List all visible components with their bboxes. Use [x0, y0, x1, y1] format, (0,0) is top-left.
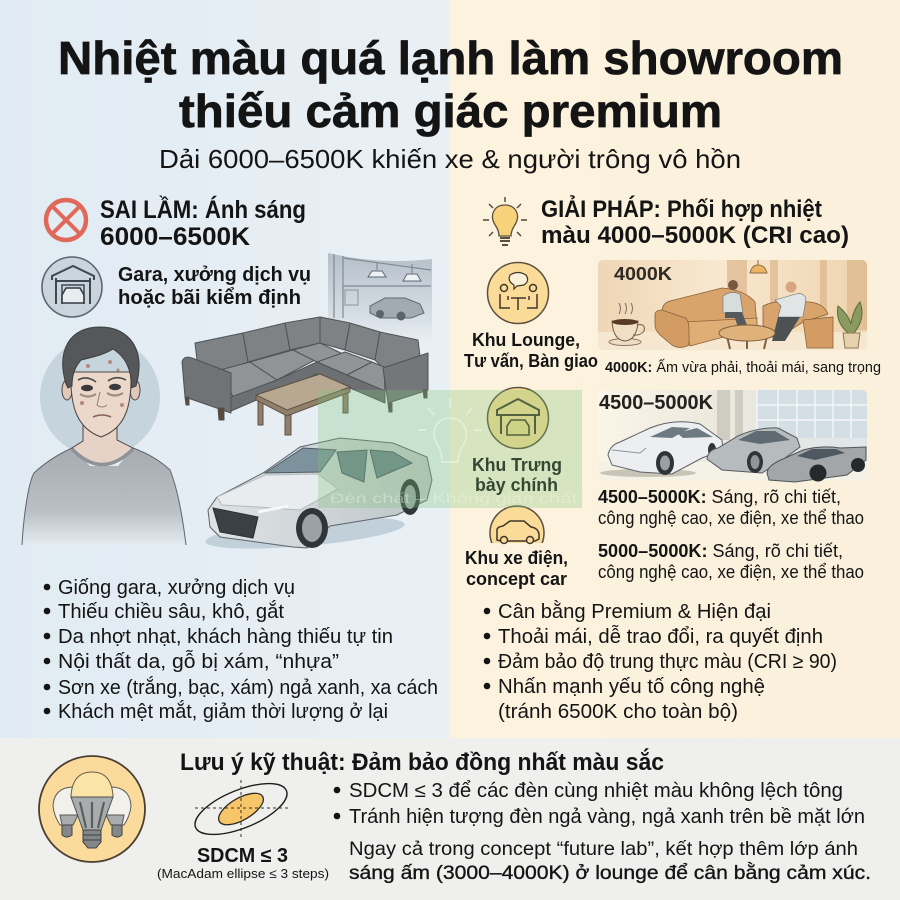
4500-5000K description: 4500–5000K: Sáng, rõ chi tiết, [598, 487, 841, 507]
EV zone label: Khu xe điện, [465, 548, 568, 568]
sports car [767, 447, 866, 482]
5000-5000K description [598, 541, 864, 582]
garage background scene [328, 253, 432, 340]
mistake bullet list [44, 577, 438, 723]
4500-5000K description [598, 487, 864, 528]
5000-5000K description: công nghệ cao, xe điện, xe thể thao [598, 562, 864, 582]
left tan sofa [655, 288, 757, 348]
solution bullet list [484, 600, 837, 723]
back cushions [195, 317, 420, 372]
main showroom zone label [472, 455, 562, 495]
main bulb [71, 772, 113, 797]
mistake bullet list: Da nhợt nhạt, khách hàng thiếu tự tin [58, 626, 393, 648]
mistake heading [100, 195, 306, 251]
solution heading [541, 194, 849, 249]
technical closing note [349, 838, 871, 884]
legs [185, 390, 427, 420]
left small bulb [53, 787, 82, 825]
icon: main showroom garage [488, 388, 548, 448]
lounge zone label: Khu Lounge, [472, 330, 580, 350]
5000-5000K description: 5000–5000K: Sáng, rõ chi tiết, [598, 541, 843, 561]
lounge description: 4000K: Ấm vừa phải, thoải mái, sang trọng [605, 359, 881, 376]
technical bullet list: Tránh hiện tượng đèn ngả vàng, ngả xanh trên bề mặt lớn [349, 806, 865, 828]
showroom image 4500-5000K [598, 390, 867, 480]
coffee table [256, 374, 350, 435]
watermark: Đèn chất – Không gian chất [330, 490, 577, 506]
icon: tired man [22, 327, 186, 545]
technical closing note: sáng ấm (3000–4000K) ở lounge để cân bằng cảm xúc. [349, 861, 871, 884]
mistake bullet list: Thiếu chiều sâu, khô, gắt [58, 600, 284, 623]
right small bulb [102, 787, 131, 825]
solution bullet list: Thoải mái, dễ trao đổi, ra quyết định [498, 625, 823, 648]
woman [723, 292, 743, 313]
plant [837, 302, 862, 333]
mistake bullet list: Giống gara, xưởng dịch vụ [58, 577, 295, 599]
silver car [204, 438, 432, 555]
seats [220, 343, 385, 397]
solution bullet list: Nhấn mạnh yếu tố công nghệ [498, 676, 765, 698]
garage caption: hoặc bãi kiểm định [118, 287, 301, 309]
right tan sofa [763, 301, 833, 348]
garage caption: Gara, xưởng dịch vụ [118, 264, 311, 286]
icon: LED bulbs [39, 756, 145, 862]
MacAdam note: (MacAdam ellipse ≤ 3 steps) [157, 866, 329, 881]
panel: mistake [22, 195, 432, 555]
grey sofa [182, 317, 428, 420]
subtitle: Dải 6000–6500K khiến xe & người trông vô hồn [159, 144, 741, 174]
EV zone label: concept car [466, 569, 567, 589]
coffee cup [609, 338, 641, 346]
solution heading: màu 4000–5000K (CRI cao) [541, 222, 849, 249]
diagram: MacAdam ellipse [188, 773, 294, 845]
EV zone label [465, 548, 568, 589]
panel: technical note [0, 738, 900, 900]
technical heading: Lưu ý kỹ thuật: Đảm bảo đồng nhất màu sắc [180, 748, 664, 776]
grey EV [707, 428, 800, 473]
lounge image 4000K [598, 260, 867, 350]
panel: solution [464, 194, 881, 589]
lounge 4000K tag: 4000K [614, 264, 672, 284]
technical bullet list: SDCM ≤ 3 để các đèn cùng nhiệt màu không lệch tông [349, 780, 843, 802]
solution bullet list: Cân bằng Premium & Hiện đại [498, 600, 771, 623]
mistake bullet list: Nội thất da, gỗ bị xám, “nhựa” [58, 650, 339, 673]
lounge zone label [464, 330, 598, 371]
title: Nhiệt màu quá lạnh làm showroom [58, 32, 843, 84]
mistake bullet list: Khách mệt mắt, giảm thời lượng ở lại [58, 700, 388, 723]
white EV [600, 422, 723, 477]
icon: EV car [489, 505, 545, 544]
mistake heading: 6000–6500K [100, 223, 250, 251]
front base [231, 362, 385, 411]
icon: lounge consultation [488, 262, 548, 324]
title: thiếu cảm giác premium [179, 85, 722, 137]
main showroom zone label: Khu Trưng [472, 455, 562, 475]
lounge zone label: Tư vấn, Bàn giao [464, 351, 598, 371]
mistake heading: SAI LẦM: Ánh sáng [100, 195, 306, 224]
round table [726, 339, 768, 350]
left arm [182, 357, 231, 413]
right arm [383, 353, 428, 403]
main showroom zone label: bày chính [475, 475, 558, 495]
4500-5000K description: công nghệ cao, xe điện, xe thể thao [598, 508, 864, 528]
solution bullet list: Đảm bảo độ trung thực màu (CRI ≥ 90) [498, 651, 837, 673]
title [58, 32, 843, 137]
solution heading: GIẢI PHÁP: Phối hợp nhiệt [541, 194, 822, 223]
technical closing note: Ngay cả trong concept “future lab”, kết hợp thêm lớp ánh [349, 838, 858, 860]
solution bullet list: (tránh 6500K cho toàn bộ) [498, 701, 738, 723]
background: cool left side [0, 0, 450, 738]
garage caption [118, 264, 311, 309]
icon: light bulb [483, 197, 527, 245]
icon: red cross [46, 200, 86, 240]
technical bullet list [334, 780, 865, 828]
background: warm right side [450, 0, 900, 738]
icon: garage [42, 257, 102, 317]
mistake bullet list: Sơn xe (trắng, bạc, xám) ngả xanh, xa cách [58, 676, 438, 699]
man [775, 294, 806, 317]
watermark [318, 390, 582, 508]
showroom 4500-5000K tag: 4500–5000K [599, 392, 714, 414]
SDCM label: SDCM ≤ 3 [197, 845, 288, 867]
